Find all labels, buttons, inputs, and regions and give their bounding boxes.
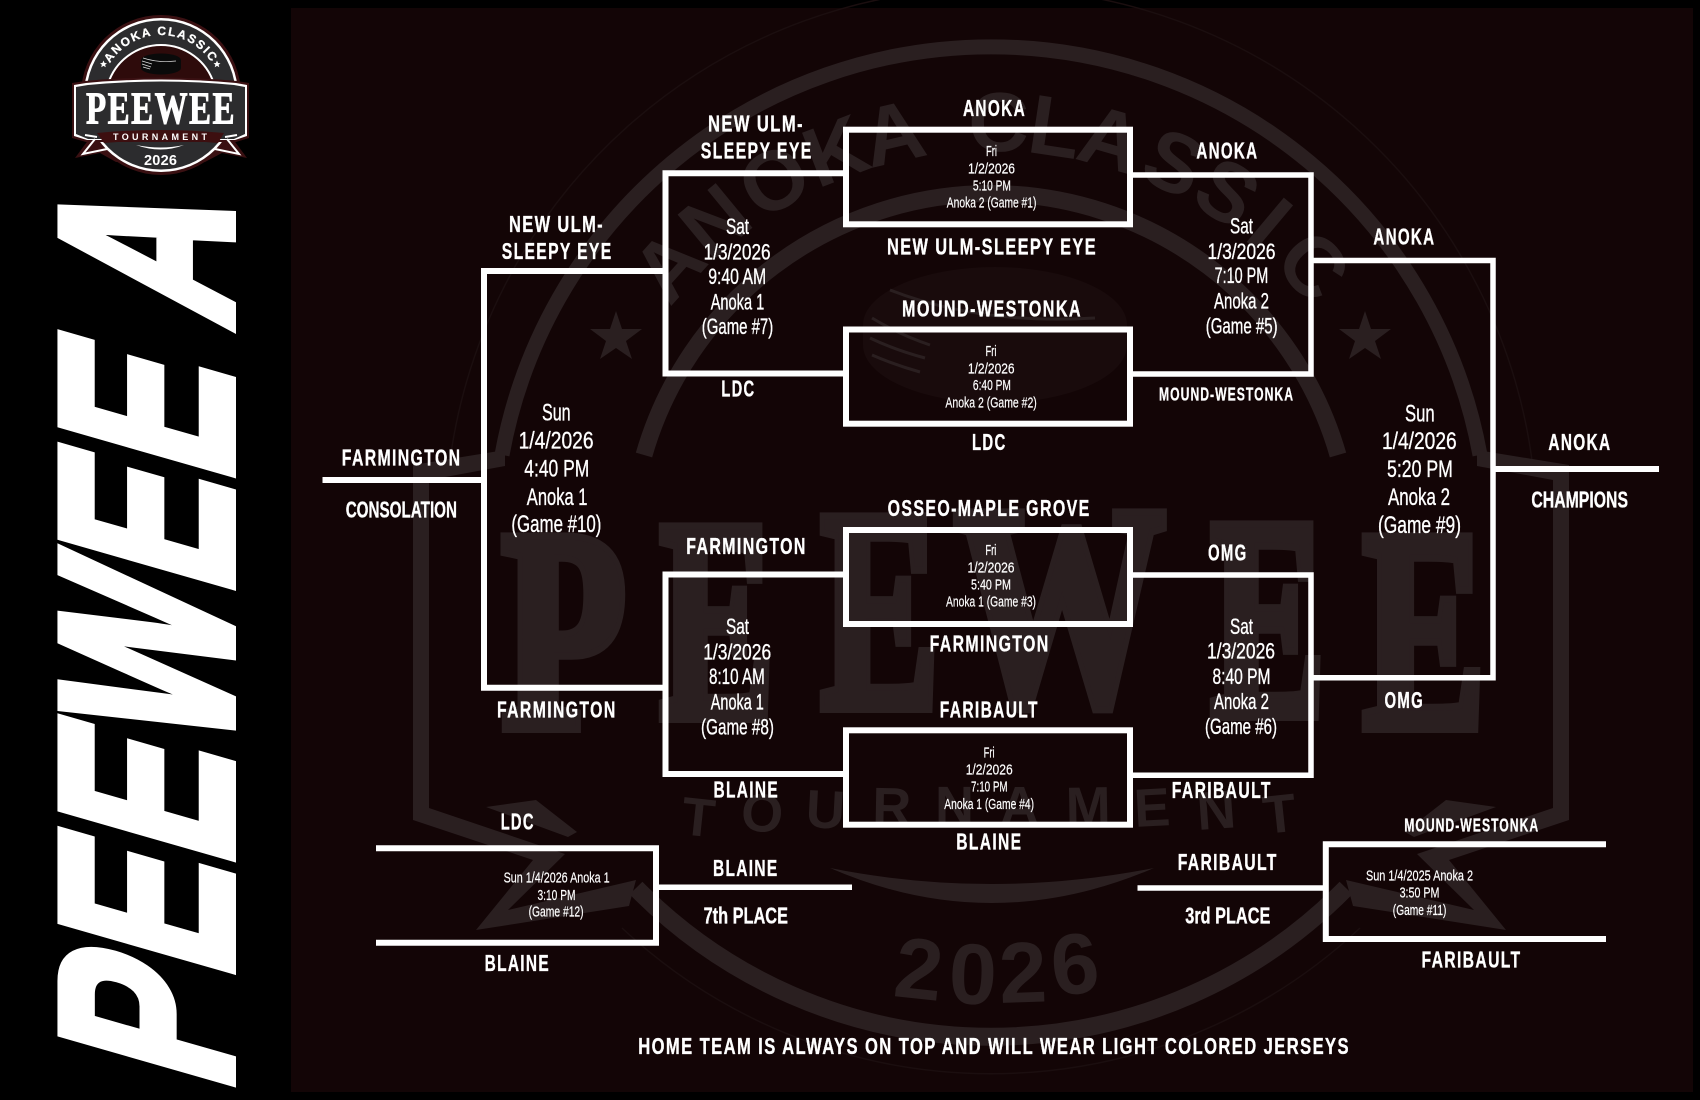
watermark: curved title ANOKA CLASSIC: O bbox=[722, 123, 826, 237]
game 1 away team: NEW ULM-SLEEPY EYE bbox=[887, 234, 1097, 260]
game 2 away team: LDC bbox=[972, 429, 1006, 455]
logo: circular body bbox=[81, 15, 241, 175]
watermark: curved title ANOKA CLASSIC bbox=[613, 75, 1369, 320]
watermark: curved title ANOKA CLASSIC: S bbox=[1129, 108, 1220, 217]
champion: ANOKA bbox=[1548, 429, 1611, 455]
watermark: tournament logo bbox=[413, 0, 1569, 1074]
game 6 home team: OMG bbox=[1208, 540, 1248, 566]
game 1 schedule: 1/2/2026 bbox=[968, 160, 1015, 177]
game 10 home team line 2: SLEEPY EYE bbox=[502, 238, 612, 264]
game 7 schedule: (Game #7) bbox=[702, 314, 773, 339]
game 7 schedule: Sat bbox=[726, 214, 750, 239]
game 7 home team line 2: SLEEPY EYE bbox=[701, 137, 813, 163]
team labels bbox=[342, 95, 1628, 976]
game 12 home team: LDC bbox=[501, 808, 535, 834]
game 6 schedule: 8:40 PM bbox=[1212, 664, 1270, 689]
game 8 home team: FARMINGTON bbox=[686, 533, 807, 559]
game 3 away team: FARMINGTON bbox=[930, 631, 1050, 657]
game 1 schedule: Fri bbox=[986, 143, 997, 160]
game 2 home team: MOUND-WESTONKA bbox=[902, 296, 1082, 322]
watermark: curved title ANOKA CLASSIC: S bbox=[1178, 137, 1276, 247]
game 4 box bbox=[846, 730, 1130, 825]
watermark: curved title ANOKA CLASSIC: K bbox=[790, 96, 881, 206]
watermark: right shield side and ribbon tail bbox=[1346, 450, 1569, 930]
logo: PEEWEE: PEEWEE bbox=[86, 82, 236, 134]
watermark: PEEWEE letters: E bbox=[1363, 472, 1485, 788]
game 12 away team: BLAINE bbox=[485, 950, 550, 976]
game 9 home team: ANOKA bbox=[1373, 223, 1435, 249]
game 10 schedule: 1/4/2026 bbox=[519, 427, 594, 454]
game 8 bracket bbox=[666, 574, 846, 774]
watermark: smile curve bbox=[830, 868, 1154, 903]
game 4 schedule: Anoka 1 (Game #4) bbox=[944, 796, 1034, 813]
watermark: TOURNAMENT: TOURNAMENT bbox=[679, 776, 1299, 849]
game 5 bracket bbox=[1130, 175, 1311, 374]
game 9 schedule: (Game #9) bbox=[1378, 512, 1461, 539]
3rd place label: 3rd PLACE bbox=[1185, 903, 1270, 929]
7th place line bbox=[656, 885, 852, 890]
watermark: upper ribbon tips bbox=[486, 800, 1496, 837]
game 4 schedule: Fri bbox=[984, 744, 995, 761]
champions line bbox=[1493, 466, 1659, 472]
game 11 away team: FARIBAULT bbox=[1422, 947, 1522, 973]
game 9 away team: OMG bbox=[1384, 687, 1424, 713]
game 1 schedule: 5:10 PM bbox=[973, 178, 1011, 195]
7th place label: 7th PLACE bbox=[704, 903, 788, 929]
game 4 schedule: 7:10 PM bbox=[971, 779, 1008, 796]
game 10 schedule: Anoka 1 bbox=[527, 484, 588, 511]
game 10 away team: FARMINGTON bbox=[497, 697, 617, 723]
watermark: outer ring top bbox=[502, 47, 1480, 455]
game 6 schedule: Sat bbox=[1230, 614, 1254, 639]
game 5 schedule: Sat bbox=[1230, 213, 1254, 238]
game 12 schedule bbox=[504, 870, 610, 921]
game 11 schedule: Sun 1/4/2025 Anoka 2 bbox=[1366, 868, 1473, 885]
logo: ribbon tails bbox=[75, 135, 247, 162]
game 3 schedule: 5:40 PM bbox=[971, 576, 1011, 593]
game 3 schedule bbox=[946, 542, 1036, 611]
game 9 schedule: 5:20 PM bbox=[1387, 456, 1453, 483]
game 5 schedule: 1/3/2026 bbox=[1208, 239, 1276, 264]
game 2 schedule: Fri bbox=[986, 343, 996, 360]
game 1 home team: ANOKA bbox=[963, 95, 1026, 121]
watermark: PEEWEE letters: P bbox=[502, 472, 626, 788]
watermark: PEEWEE letters: E bbox=[821, 452, 939, 768]
game 9 schedule bbox=[1378, 400, 1461, 539]
game 2 schedule: 6:40 PM bbox=[973, 377, 1011, 394]
game 7 away team: LDC bbox=[721, 376, 755, 402]
watermark: left star bbox=[590, 311, 642, 359]
game 11 schedule: (Game #11) bbox=[1393, 902, 1446, 919]
logo: 2026: 2026 bbox=[144, 153, 177, 169]
watermark: curved title ANOKA CLASSIC: A bbox=[853, 81, 934, 186]
watermark: right star bbox=[1339, 311, 1391, 359]
game 8 away team: BLAINE bbox=[714, 777, 779, 803]
watermark: PEEWEE letters: E bbox=[660, 462, 774, 778]
game 11 home team: MOUND-WESTONKA bbox=[1404, 816, 1539, 836]
game 6 schedule bbox=[1205, 614, 1277, 739]
watermark: PEEWEE letters: E bbox=[1211, 460, 1325, 776]
watermark: puck bbox=[863, 267, 1127, 403]
bracket lines bbox=[322, 130, 1659, 943]
watermark: PEEWEE letters: W bbox=[955, 448, 1165, 764]
watermark: curved title ANOKA CLASSIC: A bbox=[613, 212, 724, 320]
watermark: inner ring bbox=[644, 194, 1338, 455]
game 6 schedule: Anoka 2 bbox=[1214, 689, 1269, 714]
game 8 schedule: 1/3/2026 bbox=[703, 639, 771, 664]
game 1 schedule bbox=[947, 143, 1036, 211]
game 9 schedule: Anoka 2 bbox=[1388, 484, 1450, 511]
game 9 schedule: 1/4/2026 bbox=[1382, 428, 1457, 455]
game 2 schedule: Anoka 2 (Game #2) bbox=[945, 394, 1037, 411]
game 4 schedule bbox=[944, 744, 1034, 813]
game 5 schedule: 7:10 PM bbox=[1215, 263, 1268, 288]
game 2 schedule: 1/2/2026 bbox=[968, 360, 1015, 377]
game 6 bracket bbox=[1130, 575, 1311, 775]
watermark: 2026: 2026 bbox=[890, 914, 1104, 1024]
game 7 schedule: Anoka 1 bbox=[711, 289, 764, 314]
game 8 schedule: Sat bbox=[726, 614, 750, 639]
game 2 schedule bbox=[945, 343, 1037, 411]
logo: tail highlights bbox=[83, 135, 239, 154]
side bar: logo badge bbox=[72, 15, 249, 175]
game 10 schedule: Sun bbox=[542, 400, 571, 427]
game 3 schedule: Fri bbox=[985, 542, 996, 559]
game 9 bracket bbox=[1311, 260, 1493, 678]
game 12 schedule: Sun 1/4/2026 Anoka 1 bbox=[504, 870, 610, 887]
game 5 schedule: Anoka 2 bbox=[1214, 288, 1269, 314]
footer note: HOME TEAM IS ALWAYS ON TOP AND WILL WEAR LIGHT COLORED JERSEYS bbox=[638, 1033, 1350, 1059]
logo: ribbon bbox=[97, 130, 224, 143]
game 3 home team: OSSEO-MAPLE GROVE bbox=[888, 495, 1091, 521]
game 9 schedule: Sun bbox=[1405, 400, 1435, 427]
game 1 box bbox=[846, 130, 1130, 224]
logo: ANOKA CLASSIC: ANOKA CLASSIC bbox=[105, 26, 217, 64]
game 4 schedule: 1/2/2026 bbox=[966, 762, 1013, 779]
logo: TOURNAMENT: TOURNAMENT bbox=[113, 132, 208, 142]
game 6 schedule: 1/3/2026 bbox=[1207, 639, 1275, 664]
consolation line bbox=[322, 477, 484, 483]
3rd place line bbox=[1138, 885, 1326, 891]
game 11 schedule: 3:50 PM bbox=[1400, 885, 1439, 902]
game 10 home team: NEW ULM- bbox=[509, 211, 604, 237]
logo: smile bbox=[136, 145, 184, 150]
game 6 schedule: (Game #6) bbox=[1205, 714, 1277, 739]
game 10 schedule: (Game #10) bbox=[511, 511, 601, 538]
logo: puck bbox=[141, 54, 181, 75]
game 6 away team: FARIBAULT bbox=[1172, 777, 1272, 803]
game 12 schedule: 3:10 PM bbox=[538, 887, 576, 904]
7th place winner: BLAINE bbox=[713, 855, 779, 881]
game 7 home team: NEW ULM- bbox=[708, 111, 804, 137]
watermark: faint outer outline bbox=[449, 0, 1533, 1074]
logo: inner dome bbox=[108, 45, 214, 84]
watermark: curved title ANOKA CLASSIC: I bbox=[1231, 180, 1309, 267]
game 3 schedule: 1/2/2026 bbox=[968, 559, 1014, 576]
logo: banner bbox=[72, 78, 249, 142]
watermark: outer ring bottom bbox=[636, 888, 1346, 1037]
game 4 away team: BLAINE bbox=[956, 828, 1022, 854]
game 3 box bbox=[846, 530, 1130, 624]
watermark: PEEWEE letters bbox=[502, 448, 1485, 788]
game 5 schedule: (Game #5) bbox=[1206, 314, 1278, 338]
game 12 bracket bbox=[376, 848, 656, 943]
game 1 schedule: Anoka 2 (Game #1) bbox=[947, 194, 1036, 211]
game 10 schedule: 4:40 PM bbox=[524, 456, 589, 483]
watermark: curved title ANOKA CLASSIC: N bbox=[662, 166, 768, 277]
game 5 away team: MOUND-WESTONKA bbox=[1159, 384, 1294, 404]
game 11 schedule bbox=[1366, 868, 1473, 919]
game 2 box bbox=[846, 330, 1130, 424]
game 4 home team: FARIBAULT bbox=[940, 697, 1039, 723]
3rd place winner: FARIBAULT bbox=[1178, 849, 1278, 875]
game 3 schedule: Anoka 1 (Game #3) bbox=[946, 594, 1036, 611]
logo: stars bbox=[100, 60, 220, 67]
game 12 schedule: (Game #12) bbox=[529, 904, 584, 921]
game 5 schedule bbox=[1206, 213, 1278, 338]
watermark: curved title ANOKA CLASSIC: C bbox=[1258, 212, 1369, 320]
game 7 schedule bbox=[702, 214, 773, 339]
game 10 bracket bbox=[484, 271, 665, 688]
consolation winner: FARMINGTON bbox=[342, 445, 461, 471]
game 11 bracket bbox=[1326, 844, 1606, 939]
game 7 bracket bbox=[666, 173, 846, 374]
game 5 home team: ANOKA bbox=[1196, 137, 1258, 163]
game 7 schedule: 9:40 AM bbox=[708, 264, 766, 289]
watermark: curved title ANOKA CLASSIC: A bbox=[1069, 85, 1153, 192]
game 8 schedule bbox=[701, 614, 774, 739]
watermark: left shield side and ribbon tail bbox=[413, 450, 636, 930]
watermark: curved title ANOKA CLASSIC: C bbox=[967, 75, 1030, 170]
game 10 schedule bbox=[511, 400, 601, 538]
game 7 schedule: 1/3/2026 bbox=[704, 239, 771, 264]
champions label: CHAMPIONS bbox=[1531, 487, 1628, 513]
game 8 schedule: Anoka 1 bbox=[711, 689, 764, 714]
game 8 schedule: 8:10 AM bbox=[709, 664, 765, 689]
watermark: curved title ANOKA CLASSIC: L bbox=[1023, 76, 1087, 177]
game 8 schedule: (Game #8) bbox=[701, 714, 774, 739]
consolation label: CONSOLATION bbox=[346, 496, 457, 522]
